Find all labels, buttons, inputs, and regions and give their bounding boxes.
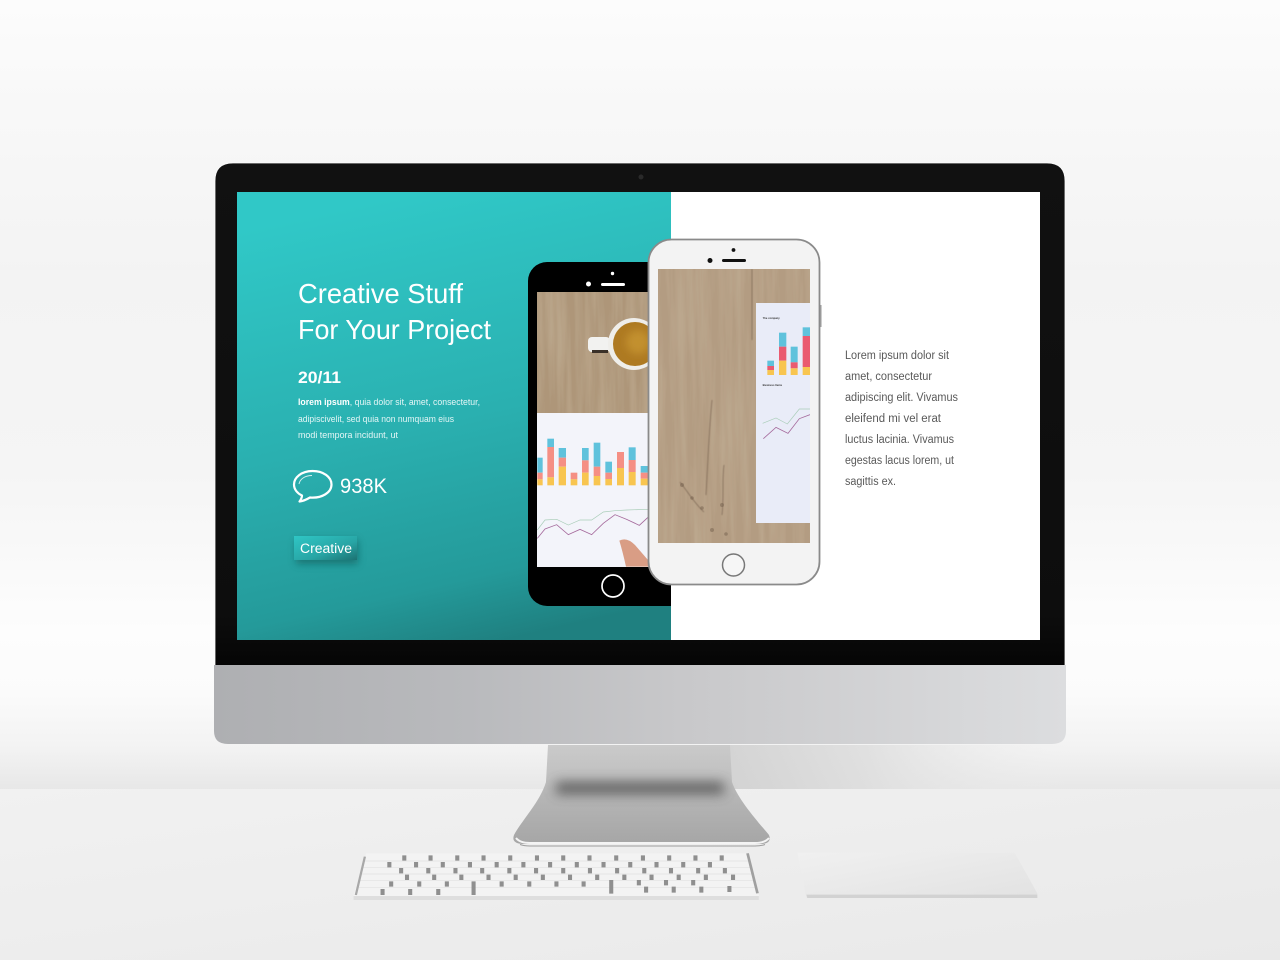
stacked bars <box>537 439 648 567</box>
camera <box>638 174 644 180</box>
home button <box>602 575 624 597</box>
phone photo: coffee and charts <box>537 292 660 567</box>
aluminium chin <box>214 665 1066 744</box>
heading <box>298 278 491 345</box>
monitor body <box>214 163 1066 744</box>
button: Creative: Creative <box>300 541 352 556</box>
wood knots <box>680 483 728 536</box>
body text right: luctus lacinia. Vivamus <box>845 434 954 446</box>
body text right: eleifend mi vel erat <box>845 413 942 425</box>
date: 20/11 <box>298 368 341 387</box>
home button <box>722 554 744 576</box>
heading: For Your Project <box>298 314 491 345</box>
keyboard <box>354 853 759 900</box>
body text right: Lorem ipsum dolor sit <box>845 350 950 362</box>
body text right <box>845 350 958 488</box>
body text right: egestas lacus lorem, ut <box>845 455 955 467</box>
body text left: modi tempora incidunt, ut <box>298 430 398 441</box>
icon: speech bubble <box>294 471 332 502</box>
body text left: adipiscivelit, sed quia non numquam eius <box>298 414 454 425</box>
stat: 938K: 938K <box>340 475 387 498</box>
body text right: amet, consectetur <box>845 371 932 383</box>
body text left <box>298 397 480 441</box>
phone: white <box>648 240 822 584</box>
button: Creative <box>294 536 358 564</box>
monitor stand <box>513 745 770 846</box>
black bezel <box>215 163 1065 666</box>
stand shadow on wall <box>730 745 1070 789</box>
coffee cup <box>588 318 648 370</box>
finger <box>619 539 648 567</box>
trackpad <box>797 853 1037 898</box>
phone photo: wood and charts <box>658 269 810 543</box>
phone: black <box>528 262 671 606</box>
desk surface <box>0 789 1280 960</box>
shadow band on stand <box>556 782 724 794</box>
phone photo: wood and charts: Business Items <box>763 383 783 387</box>
body text right: adipiscing elit. Vivamus <box>845 392 958 404</box>
line chart <box>537 509 648 530</box>
phone photo: wood and charts: The company <box>763 316 780 320</box>
heading: Creative Stuff <box>298 278 463 309</box>
panel: teal left <box>237 192 671 640</box>
body text left: lorem ipsum, quia dolor sit, amet, consectetur, <box>298 397 480 408</box>
slide screen <box>237 192 1040 640</box>
body text right: sagittis ex. <box>845 476 896 488</box>
